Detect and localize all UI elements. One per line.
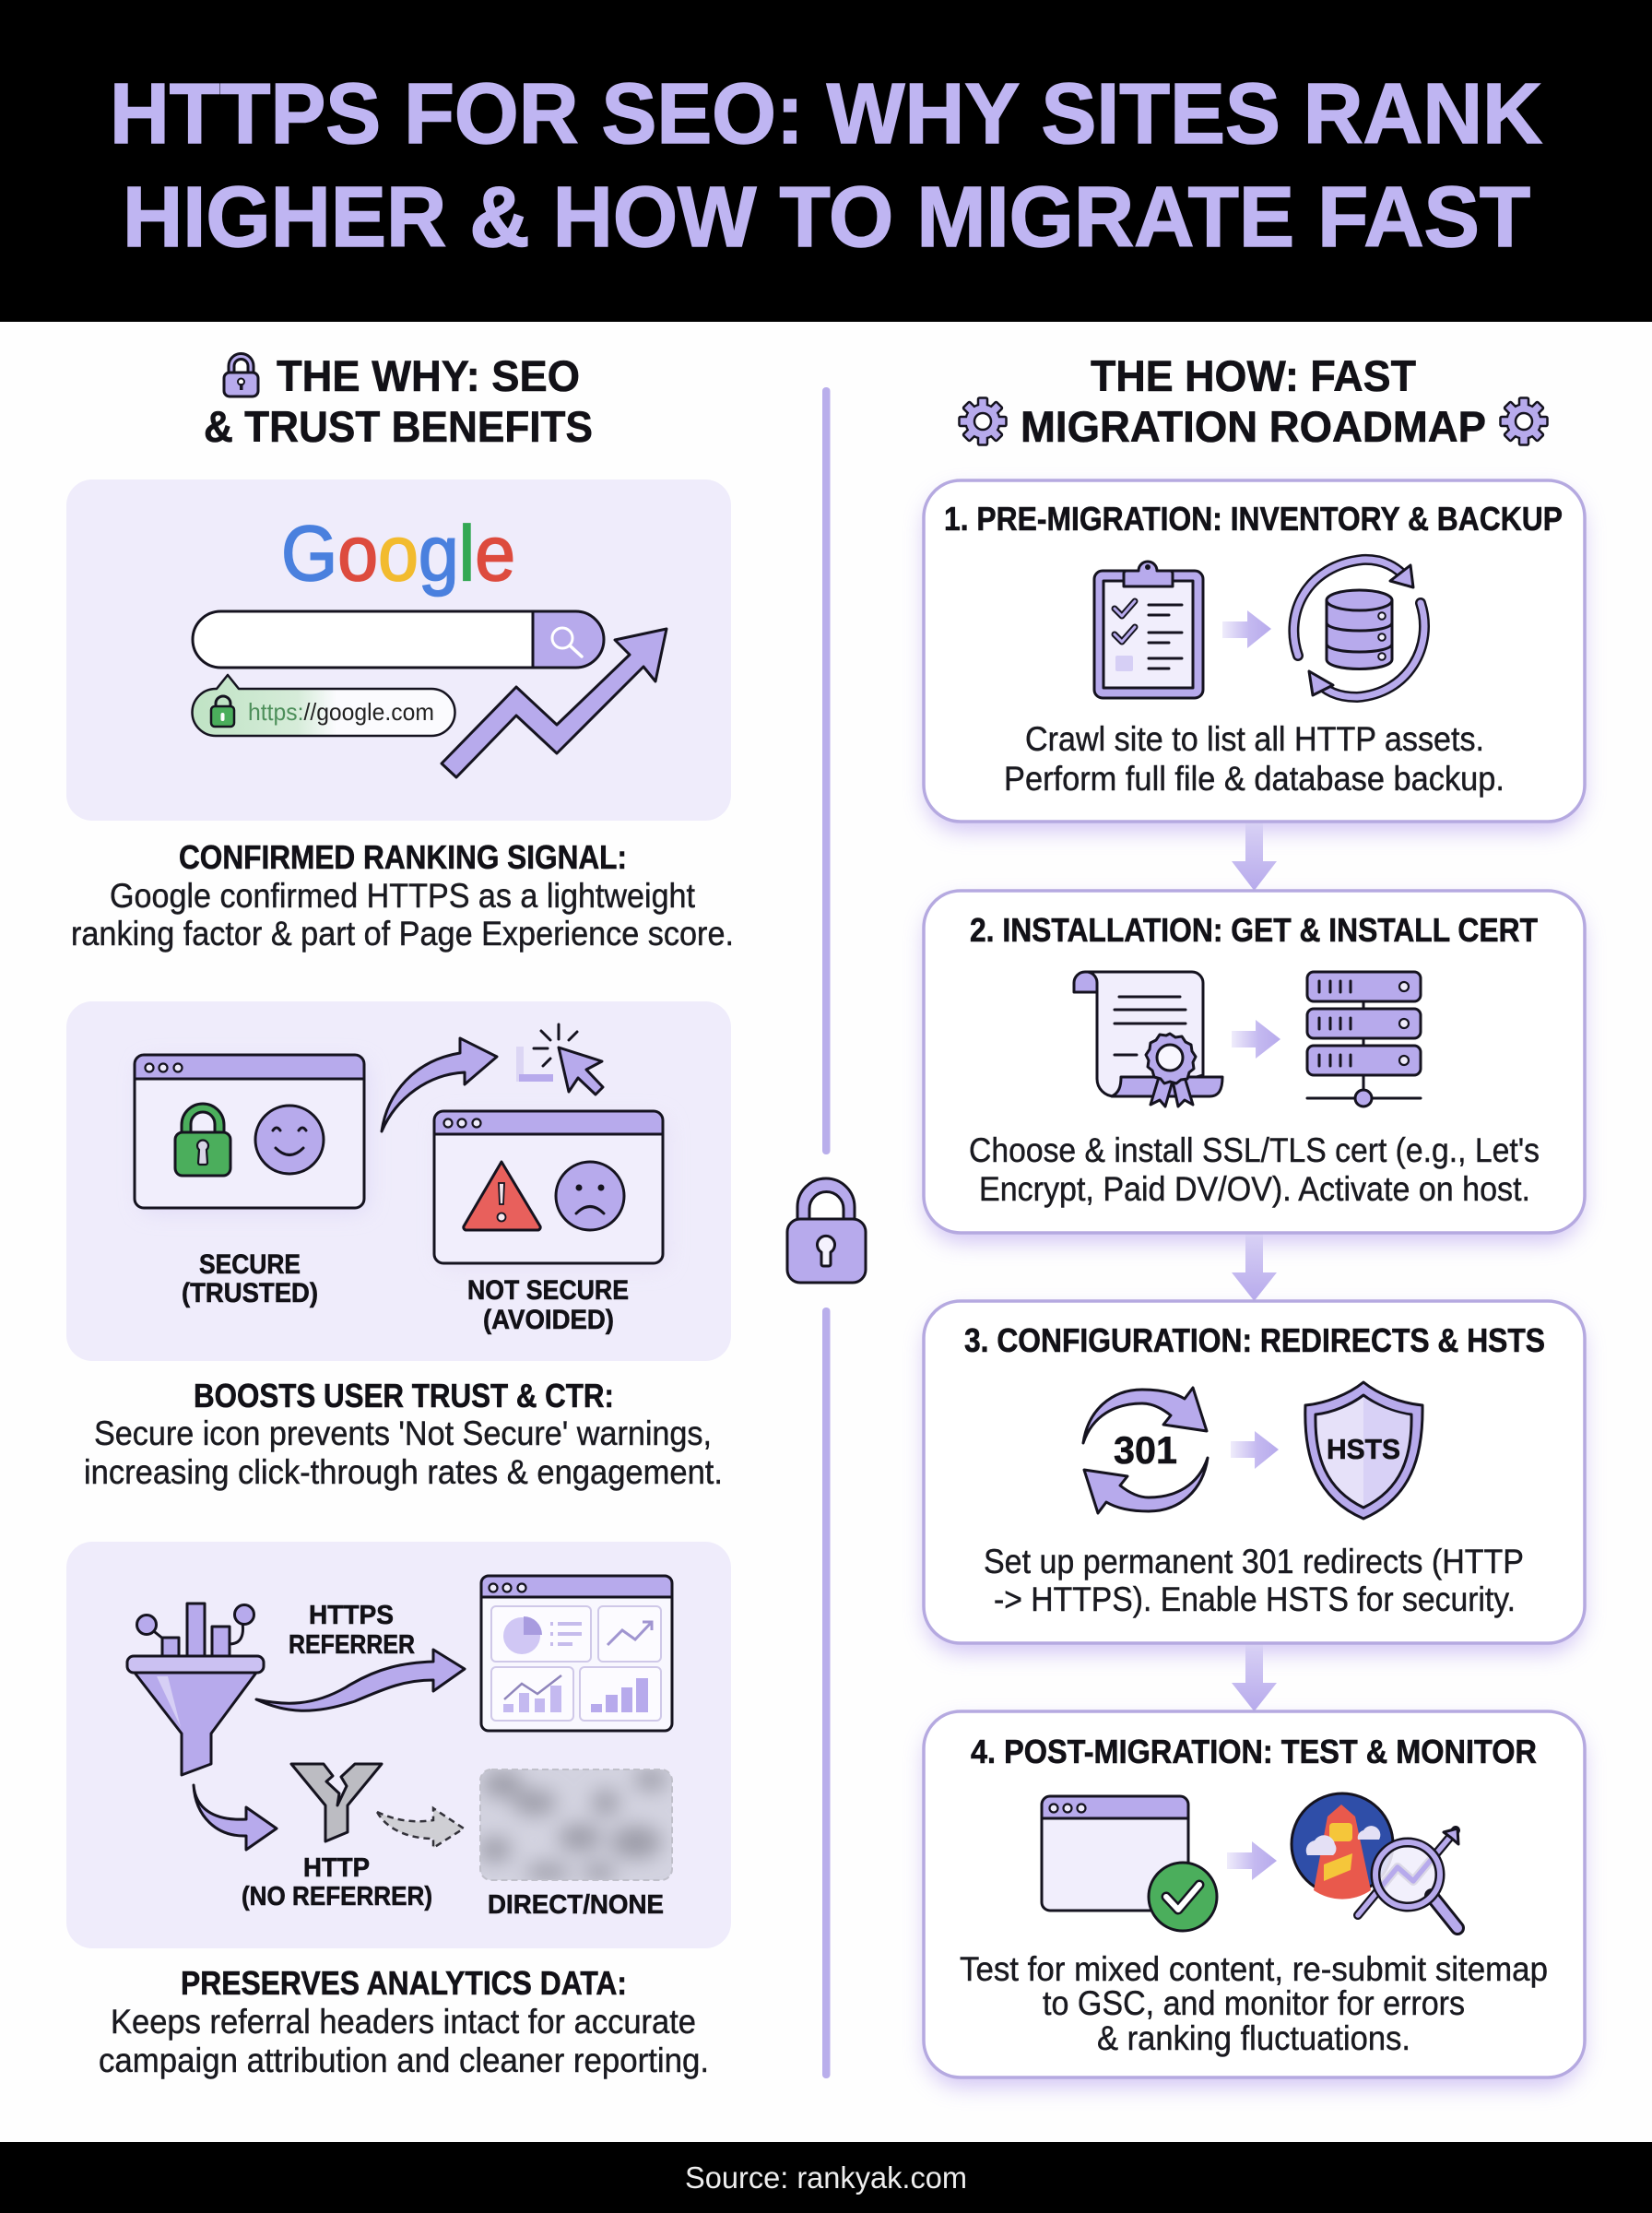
icon: click cursor	[516, 1024, 603, 1095]
heading: step 4: 4. POST-MIGRATION: TEST & MONITOR	[971, 1733, 1537, 1770]
caption: user trust: increasing click-through rates & engagement.	[84, 1453, 723, 1491]
caption: confirmed ranking signal	[71, 838, 734, 953]
icon: 301 redirect	[1083, 1388, 1208, 1513]
arrow	[1227, 1841, 1277, 1880]
dashboard	[481, 1576, 672, 1731]
icon: left gear	[959, 398, 1007, 444]
icon: database backup	[1293, 560, 1424, 697]
heading: step 2: 2. INSTALLATION: GET & INSTALL CERT	[970, 911, 1538, 949]
icon: HSTS shield: HSTS	[1327, 1433, 1400, 1465]
caption: analytics data: campaign attribution and cleaner reporting.	[99, 2041, 709, 2079]
footer: Source: rankyak.com	[685, 2160, 967, 2195]
arrow	[1222, 610, 1271, 648]
heading: the why	[204, 351, 593, 451]
url pill	[192, 675, 455, 736]
icon: clipboard	[1094, 562, 1203, 698]
card shadows	[926, 491, 1583, 2087]
wavy arrow	[256, 1650, 465, 1710]
icon: 301 redirect: 301	[1114, 1428, 1177, 1472]
logo: Google: Google	[281, 510, 515, 597]
blurred data box	[478, 1769, 672, 1881]
card: step 2	[924, 891, 1585, 1233]
center divider top	[822, 387, 830, 1154]
icon: right gear	[1501, 398, 1547, 444]
caption: analytics data	[99, 1964, 709, 2079]
footer	[0, 2142, 1652, 2213]
caption: confirmed ranking signal: CONFIRMED RANKING SIGNAL:	[179, 838, 627, 876]
heading: step 1: 1. PRE-MIGRATION: INVENTORY & BACKUP	[944, 500, 1563, 538]
text: step 2: Choose & install SSL/TLS cert (e.g., Let's	[969, 1131, 1540, 1169]
label: secure: (TRUSTED)	[182, 1278, 318, 1308]
caption: confirmed ranking signal: ranking factor & part of Page Experience score.	[71, 915, 734, 953]
connector arrow 1 to 2	[1232, 822, 1277, 891]
caption: user trust: BOOSTS USER TRUST & CTR:	[194, 1377, 614, 1414]
trend line	[608, 1622, 652, 1645]
title banner: HTTPS FOR SEO: WHY SITES RANK	[110, 65, 1542, 161]
panel: user trust	[66, 1001, 731, 1361]
arrow	[1232, 1020, 1280, 1059]
icon: center lock	[787, 1178, 866, 1283]
caption: user trust	[84, 1377, 723, 1491]
label: secure	[182, 1249, 318, 1308]
label: not secure	[467, 1275, 629, 1335]
icon: heading lock	[224, 354, 258, 396]
title banner	[0, 0, 1652, 322]
arrow	[1231, 1431, 1279, 1469]
text: step 3: Set up permanent 301 redirects (HTTP	[984, 1543, 1524, 1580]
text: step 4: to GSC, and monitor for errors	[1043, 1984, 1465, 2022]
icon: sad face	[556, 1162, 624, 1230]
text: step 3: -> HTTPS). Enable HSTS for security.	[994, 1580, 1516, 1618]
search bar	[193, 611, 604, 668]
heading: the how: THE HOW: FAST	[1091, 351, 1416, 400]
icon: broken filter	[291, 1764, 382, 1841]
url pill: https://google.com	[248, 698, 434, 726]
label: secure: SECURE	[199, 1249, 301, 1280]
caption: user trust: Secure icon prevents 'Not Secure' warnings,	[94, 1414, 712, 1452]
small purple arrow	[194, 1785, 277, 1850]
card: step 3	[924, 1301, 1585, 1643]
text: step 1: Crawl site to list all HTTP assets.	[1025, 720, 1484, 758]
icon: smile face	[255, 1106, 324, 1174]
text: step 4: Test for mixed content, re-submit sitemap	[960, 1950, 1548, 1988]
card: step 4	[924, 1711, 1585, 2077]
browser: not secure	[434, 1111, 667, 1267]
text: step 4: & ranking fluctuations.	[1097, 2019, 1410, 2057]
card: step 1	[924, 480, 1585, 822]
label: direct none: DIRECT/NONE	[488, 1890, 664, 1920]
combo chart	[503, 1675, 561, 1712]
heading: the how	[959, 351, 1547, 451]
caption: analytics data: PRESERVES ANALYTICS DATA:	[181, 1964, 627, 2002]
text: step 3	[984, 1543, 1524, 1618]
icon: certificate	[1074, 972, 1222, 1106]
text: step 1: Perform full file & database backup.	[1004, 760, 1504, 798]
connector arrow 3 to 4	[1232, 1643, 1277, 1711]
heading: the how: MIGRATION ROADMAP	[1021, 402, 1486, 451]
center divider bottom	[822, 1308, 830, 2078]
zigzag growth arrow	[442, 629, 667, 777]
icon: funnel	[127, 1604, 264, 1775]
curved arrow	[382, 1038, 497, 1131]
heading: the why: & TRUST BENEFITS	[204, 402, 593, 451]
label: not secure: (AVOIDED)	[483, 1305, 614, 1335]
connector arrow 2 to 3	[1232, 1233, 1277, 1301]
label: https referrer: HTTPS	[309, 1601, 394, 1630]
label: https referrer	[289, 1601, 415, 1660]
caption: confirmed ranking signal: Google confirmed HTTPS as a lightweight	[110, 877, 696, 915]
caption: analytics data: Keeps referral headers intact for accurate	[111, 2003, 696, 2041]
icon: green lock	[175, 1104, 230, 1176]
bar chart	[591, 1678, 648, 1712]
panel: analytics data	[66, 1542, 731, 1948]
dashed grey arrow	[377, 1808, 464, 1848]
icon: lighthouse and magnifier	[1292, 1793, 1458, 1928]
text: step 1	[1004, 720, 1504, 798]
label: https referrer: REFERRER	[289, 1630, 415, 1660]
heading: step 3: 3. CONFIGURATION: REDIRECTS & HSTS	[964, 1321, 1545, 1359]
title banner: HIGHER & HOW TO MIGRATE FAST	[123, 169, 1530, 265]
label: not secure: NOT SECURE	[467, 1275, 629, 1306]
text: step 4	[960, 1950, 1548, 2057]
pie chart	[503, 1616, 582, 1654]
text: step 2	[969, 1131, 1540, 1208]
heading: the why: THE WHY: SEO	[277, 351, 580, 400]
panel: confirmed ranking signal	[66, 479, 731, 821]
label: http no referrer: (NO REFERRER)	[242, 1882, 432, 1911]
label: http no referrer: HTTP	[303, 1853, 370, 1883]
icon: browser with check	[1042, 1796, 1217, 1931]
browser: secure	[135, 1055, 367, 1212]
icon: server	[1307, 972, 1421, 1106]
icon: warning triangle	[464, 1162, 540, 1230]
icon: HSTS shield	[1305, 1382, 1422, 1519]
label: http no referrer	[242, 1853, 432, 1911]
text: step 2: Encrypt, Paid DV/OV). Activate on host.	[979, 1170, 1530, 1208]
